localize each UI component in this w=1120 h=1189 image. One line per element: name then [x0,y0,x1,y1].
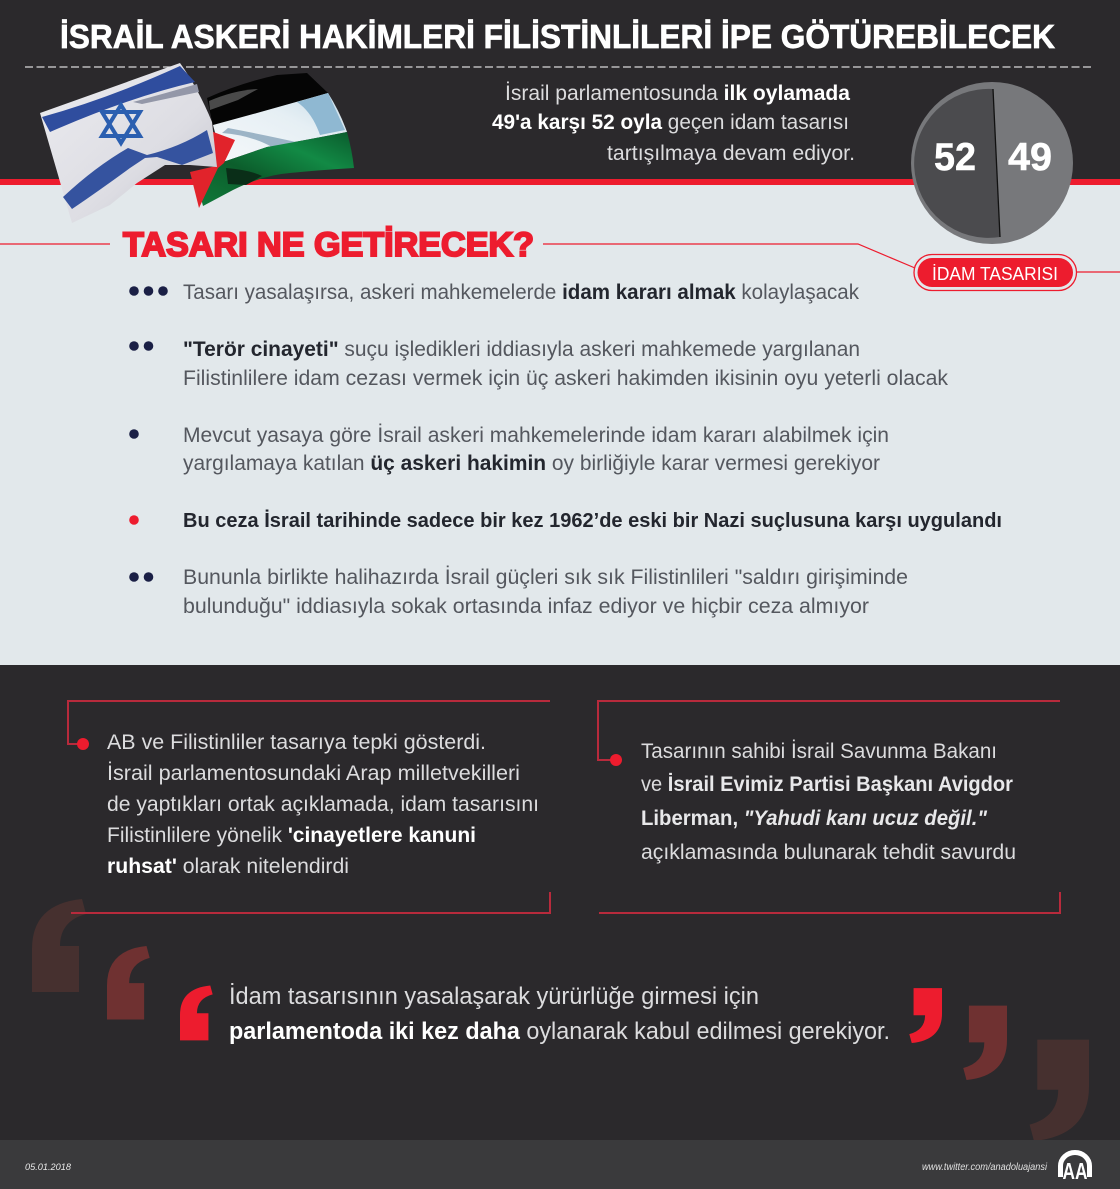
red band [0,179,1120,185]
bullet list [129,281,1002,618]
flags: Israel and Palestine [40,63,354,223]
item 2: Filistinlilere idam cezası vermek için üç askeri hakimden ikisinin oyu yeterli olacak [183,367,948,390]
item 3 [129,424,889,475]
quote text: İdam tasarısının yasalaşarak yürürlüğe girmesi için [229,983,759,1010]
pie chart: 52 vs 49: 49 [1008,136,1052,179]
panel: left callout: İsrail parlamentosundaki Arap milletvekilleri [107,762,520,785]
intro text [492,82,855,165]
panel: right callout: ve İsrail Evimiz Partisi Başkanı Avigdor [641,773,1013,796]
flag: Israel [40,63,217,223]
item 2 [129,338,948,390]
large closing quote [1030,1040,1089,1141]
panel: right callout [598,701,1060,913]
header background [0,0,1120,180]
lower dark background [0,665,1120,1140]
red closing quote [909,988,942,1043]
red opening quote [180,986,213,1040]
mid closing quote [963,1006,1007,1080]
panel: left callout: ruhsat' olarak nitelendirdi [107,855,349,878]
panel: right callout: Liberman, "Yahudi kanı ucuz değil." [641,807,988,830]
item 3: yargılamaya katılan üç askeri hakimin oy birliğiyle karar vermesi gerekiyor [183,452,880,475]
pie chart: 52 vs 49: 52 [934,136,976,179]
item 2: "Terör cinayeti" suçu işledikleri iddiasıyla askeri mahkemede yargılanan [183,338,860,361]
intro text: tartışılmaya devam ediyor. [607,142,855,165]
panel: left callout: de yaptıkları ortak açıklamada, idam tasarısını [107,793,539,816]
badge: idam tasarisi: İDAM TASARISI [932,263,1058,284]
section heading: TASARI NE GETİRECEK? [123,226,534,264]
item 3: Mevcut yasaya göre İsrail askeri mahkemelerinde idam kararı alabilmek için [183,424,889,447]
icon: Anadolu Agency logo [1060,1152,1090,1184]
panel: right callout: Tasarının sahibi İsrail Savunma Bakanı [641,740,997,763]
icon: Anadolu Agency logo: AA [1062,1158,1088,1184]
item 4: Bu ceza İsrail tarihinde sadece bir kez 1962’de eski bir Nazi suçlusuna karşı uygulandı [183,509,1002,532]
connector lines to badge [0,244,1120,272]
decorative large opening quote [32,899,86,992]
badge: idam tasarisi [914,254,1076,290]
footer bar [0,1140,1120,1189]
twitter url: www.twitter.com/anadoluajansi [922,1162,1048,1173]
item 5 [129,566,908,618]
content background [0,185,1120,665]
intro text: İsrail parlamentosunda ilk oylamada [505,82,850,105]
date: 05.01.2018 [25,1162,72,1173]
panel: left callout: AB ve Filistinliler tasarıya tepki gösterdi. [107,731,486,754]
panel: left callout: Filistinlilere yönelik 'cinayetlere kanuni [107,824,476,847]
title: İSRAİL ASKERİ HAKİMLERİ FİLİSTİNLİLERİ İPE GÖTÜREBİLECEK [60,18,1055,55]
flag: Palestine [190,73,354,208]
panel: left callout [68,701,550,913]
pie chart: 52 vs 49 [911,82,1073,244]
quote text [229,983,890,1045]
item 1: Tasarı yasalaşırsa, askeri mahkemelerde idam kararı almak kolaylaşacak [183,281,859,304]
panel: right callout: açıklamasında bulunarak tehdit savurdu [641,841,1016,864]
quote text: parlamentoda iki kez daha oylanarak kabul edilmesi gerekiyor. [229,1018,890,1045]
intro text: 49'a karşı 52 oyla geçen idam tasarısı [492,111,849,134]
item 5: Bununla birlikte halihazırda İsrail güçleri sık sık Filistinlileri "saldırı girişiminde [183,566,908,589]
item 5: bulunduğu" iddiasıyla sokak ortasında infaz ediyor ve hiçbir ceza almıyor [183,595,869,618]
mid opening quote [107,946,150,1019]
